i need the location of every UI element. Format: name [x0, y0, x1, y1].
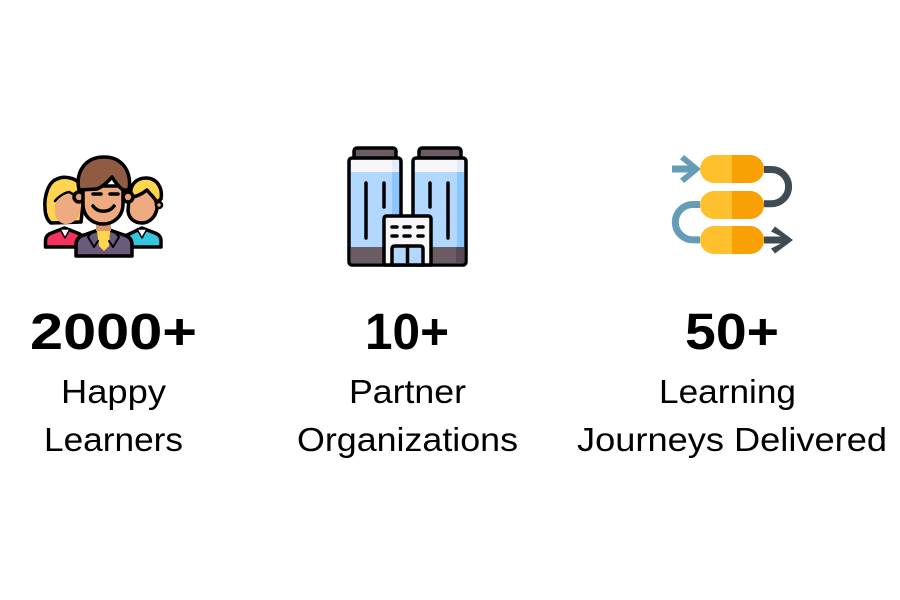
icon: office buildings [349, 148, 466, 265]
stat: 50+: 50+ [685, 303, 779, 360]
panel: learning journeys delivered [577, 155, 887, 458]
label: Learning Journeys Delivered: Journeys Delivered [577, 421, 887, 458]
panel: partner organizations [297, 148, 518, 458]
panel: happy learners [30, 157, 197, 458]
label: Happy Learners: Learners [44, 421, 183, 458]
stat: 10+: 10+ [365, 303, 449, 360]
icon: learning path [672, 155, 793, 254]
label: Partner Organizations [297, 373, 518, 458]
label: Happy Learners [44, 373, 183, 458]
label: Partner Organizations: Partner [349, 373, 466, 410]
label: Learning Journeys Delivered [577, 373, 887, 458]
stat: 2000+: 2000+ [30, 303, 197, 360]
label: Happy Learners: Happy [61, 373, 167, 410]
label: Learning Journeys Delivered: Learning [659, 373, 796, 410]
icon: group of people [45, 157, 162, 256]
label: Partner Organizations: Organizations [297, 421, 518, 458]
